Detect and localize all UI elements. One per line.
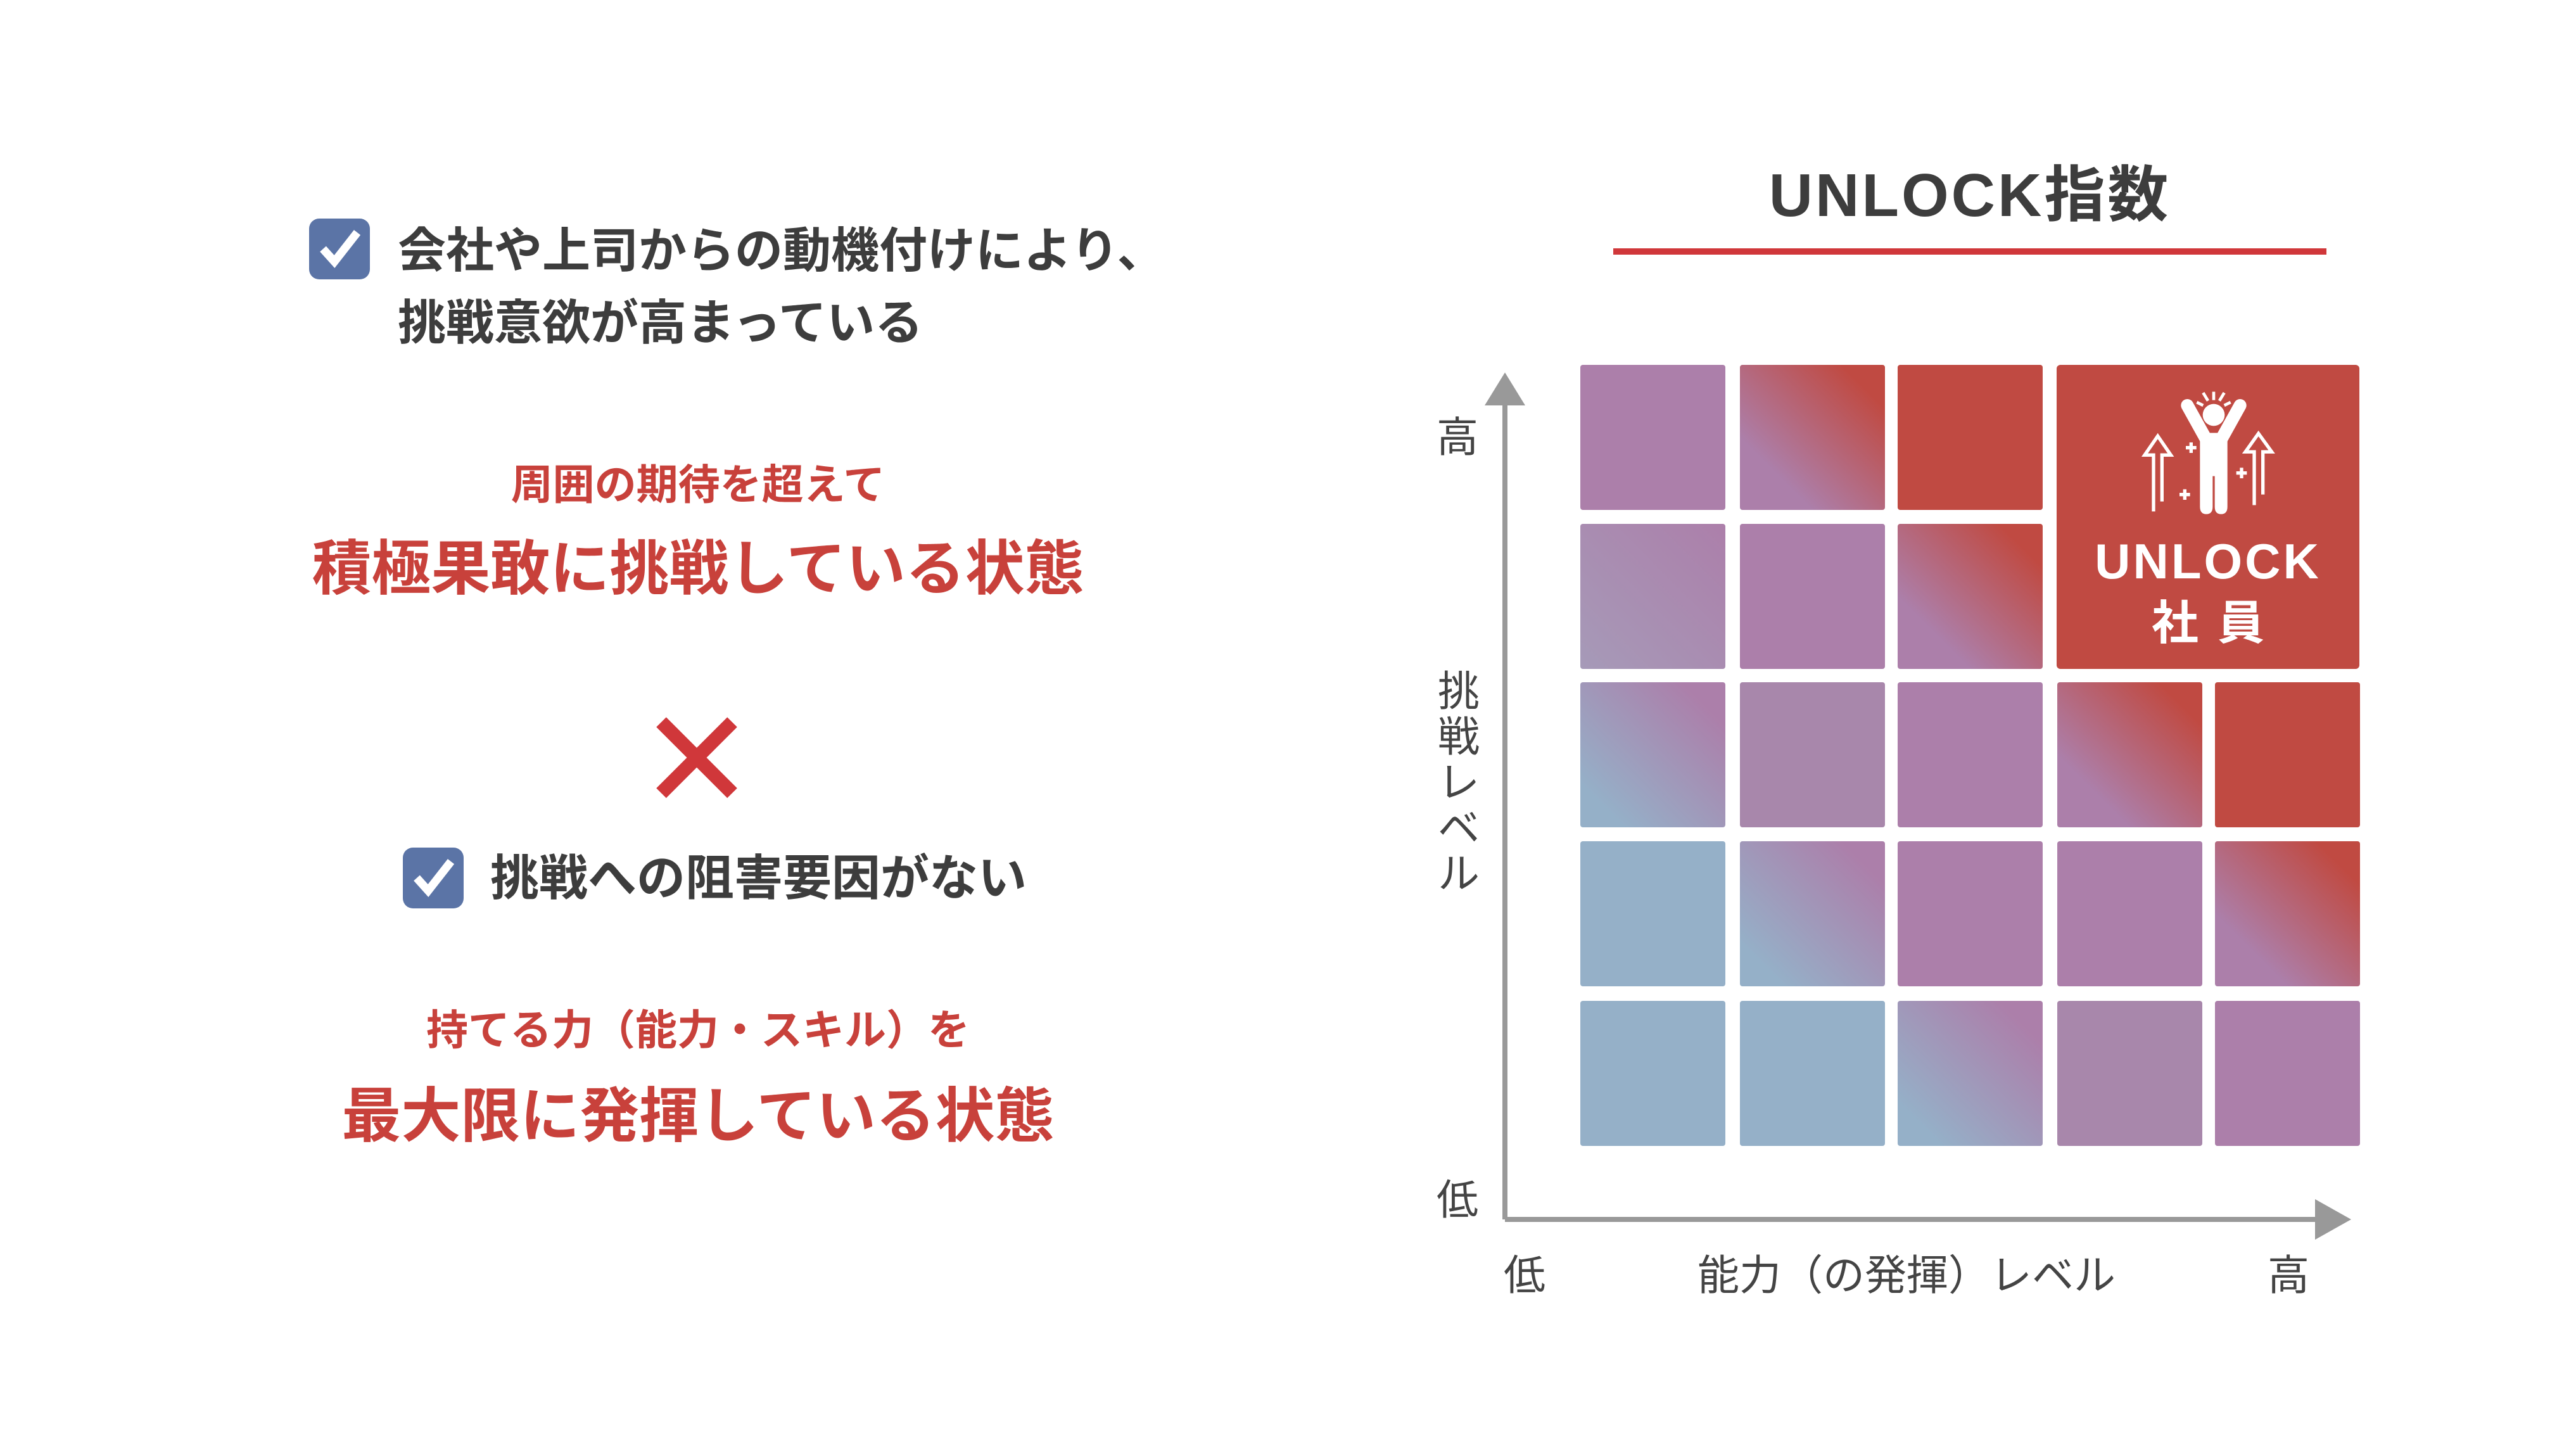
title underline <box>1613 248 2326 255</box>
label: UNLOCK 社員: 社員 <box>2152 597 2283 649</box>
red heading 1: 積極果敢に挑戦している状態 <box>312 535 1084 602</box>
UNLOCK cell <box>2057 365 2359 669</box>
red subtitle 1: 周囲の期待を超えて <box>511 461 885 508</box>
icon: person with arrows <box>2141 391 2275 514</box>
text: 能力（の発揮）レベル <box>1697 1252 2116 1299</box>
checkbox 2 <box>403 848 464 908</box>
y-axis labels: 高 <box>1437 414 1478 461</box>
label: UNLOCK 社員 <box>2095 533 2321 649</box>
text: 挑 <box>1438 668 1480 715</box>
text: 戦 <box>1438 713 1480 760</box>
red heading 2: 最大限に発揮している状態 <box>341 1083 1055 1149</box>
text: ベ <box>1438 804 1480 851</box>
chart: grid <box>1580 365 2360 1146</box>
text: レ <box>1438 759 1480 806</box>
text: motivation: 挑戦意欲が高まっている <box>398 296 923 350</box>
checkbox 1 <box>309 219 370 279</box>
red subtitle 2: 持てる力（能力・スキル）を <box>426 1007 970 1053</box>
text: 低 <box>1437 1176 1478 1223</box>
text: motivation <box>398 224 1165 350</box>
label: UNLOCK 社員: UNLOCK <box>2095 533 2321 589</box>
text: ル <box>1438 850 1480 897</box>
x-axis labels: 低 <box>1504 1252 1545 1299</box>
text: 高 <box>2268 1252 2309 1299</box>
text: motivation: 会社や上司からの動機付けにより、 <box>398 224 1165 278</box>
icon: cross <box>656 717 737 798</box>
title: UNLOCK指数 <box>1769 162 2171 229</box>
text: no obstacles: 挑戦への阻害要因がない <box>490 851 1027 906</box>
